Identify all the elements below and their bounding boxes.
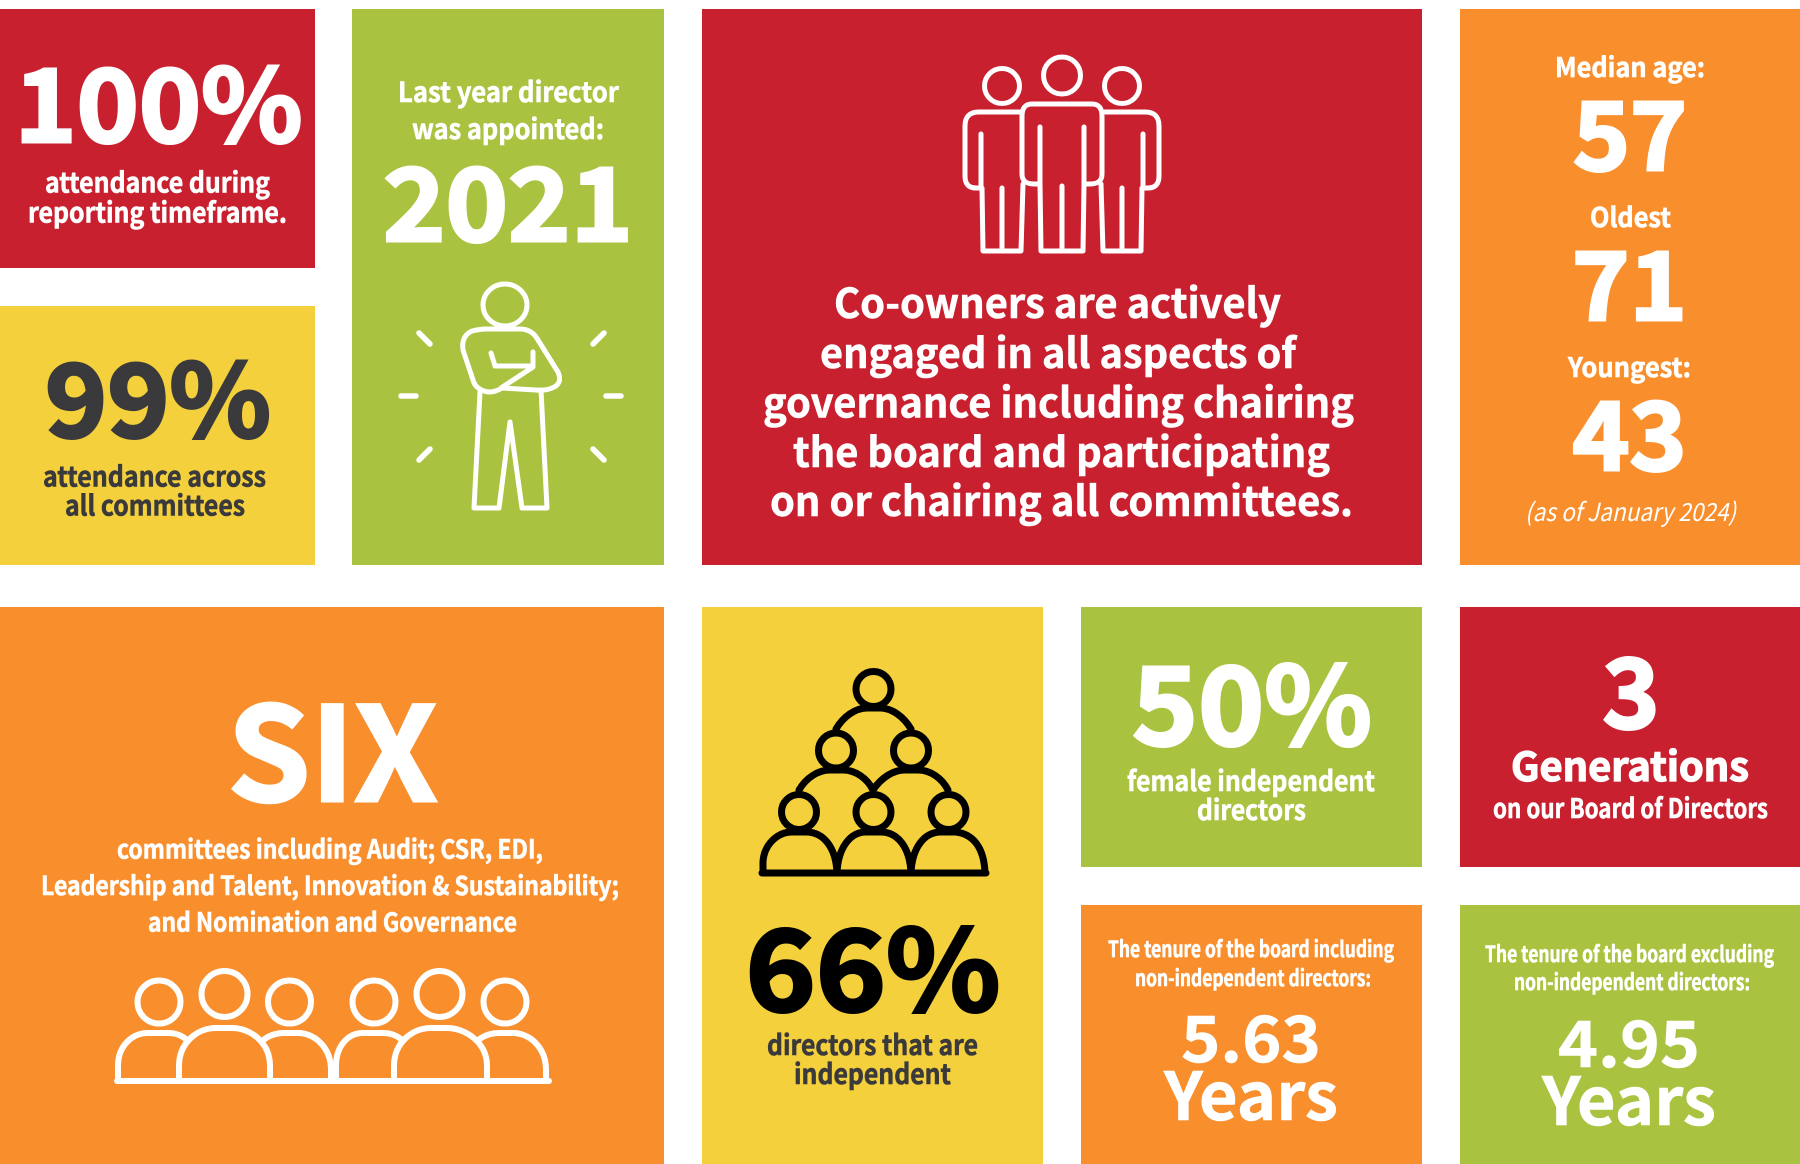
stat: 100%: 100% (14, 26, 302, 172)
text: generations: Generations (1511, 735, 1749, 793)
panel: independent directors (702, 607, 1043, 1164)
panel: 100% attendance (0, 9, 315, 268)
panel: female independent directors (1081, 607, 1422, 867)
stat: 5.63 years: Years (1163, 1044, 1338, 1140)
text: co-owners statement: the board and participating (793, 419, 1330, 479)
text: female independent directors: directors (1197, 789, 1306, 829)
text: oldest: Oldest (1590, 196, 1671, 235)
stat: 4.95 years (1541, 994, 1716, 1145)
icon: six people row (117, 971, 549, 1081)
stat: 4.95 years: 4.95 (1558, 994, 1700, 1086)
stat: 99%: 99% (45, 321, 271, 467)
panel: tenure excluding non-independent (1460, 905, 1800, 1164)
text: tenure including label (1108, 932, 1394, 993)
stat: 50%: 50% (1132, 621, 1372, 777)
text: attendance across all committees: attendance across (43, 456, 266, 496)
text: co-owners statement (763, 270, 1354, 528)
text: committees list: committees including Audit; CSR, EDI, (117, 830, 543, 866)
text: tenure including label: non-independent directors: (1135, 961, 1371, 993)
text: attendance during reporting timeframe: attendance during (45, 162, 270, 202)
text: last year director was appointed (398, 71, 620, 148)
stat: 4.95 years: Years (1541, 1049, 1716, 1145)
stat: 43: 43 (1572, 362, 1686, 498)
text: directors that are independent: independent (794, 1053, 951, 1093)
icon: three people (965, 57, 1159, 251)
stat: SIX: SIX (228, 651, 438, 839)
text: co-owners statement: engaged in all aspects of (820, 320, 1298, 380)
text: co-owners statement: Co-owners are actively (834, 270, 1281, 330)
stat: 71: 71 (1572, 212, 1687, 348)
text: directors that are independent: directors that are (767, 1024, 978, 1064)
panel: ages (1460, 9, 1800, 565)
stat: 3: 3 (1602, 617, 1660, 756)
text: last year director was appointed: Last year director (398, 71, 620, 111)
stat: 57: 57 (1573, 62, 1687, 198)
stat: 2021: 2021 (383, 125, 633, 271)
panel: 99% attendance (0, 306, 315, 565)
stat: 5.63 years: 5.63 (1181, 989, 1321, 1081)
text: committees list: and Nomination and Governance (148, 902, 517, 940)
stat: 66%: 66% (746, 882, 1000, 1044)
panel: tenure including non-independent (1081, 905, 1422, 1164)
text: attendance across all committees: all committees (65, 484, 245, 524)
text: female independent directors (1127, 760, 1375, 829)
text: female independent directors: female independent (1127, 760, 1375, 800)
text: co-owners statement: on or chairing all committees. (770, 468, 1353, 528)
text: committees list: Leadership and Talent, Innovation & Sustainability; (41, 866, 619, 903)
text: median age: Median age: (1555, 46, 1705, 85)
text: committees list (41, 830, 619, 940)
text: attendance across all committees (43, 456, 266, 524)
icon: pyramid of people (762, 672, 986, 873)
text: youngest: Youngest: (1567, 346, 1691, 385)
text: last year director was appointed: was appointed: (412, 108, 604, 148)
text: attendance during reporting timeframe (28, 162, 287, 232)
panel: co-owners engagement (702, 9, 1422, 565)
icon: person with crossed arms (401, 284, 621, 508)
text: attendance during reporting timeframe: reporting timeframe. (28, 192, 287, 232)
panel: generations (1460, 607, 1800, 867)
stat: 5.63 years (1163, 989, 1338, 1140)
text: co-owners statement: governance including chairing (763, 370, 1354, 430)
panel: last year director appointed (352, 9, 664, 565)
text: as of January 2024: (as of January 2024) (1525, 493, 1737, 529)
text: directors that are independent (767, 1024, 978, 1093)
panel: six committees (0, 607, 664, 1164)
text: tenure including label: The tenure of the board including (1108, 932, 1394, 964)
text: tenure excluding label (1485, 937, 1774, 997)
